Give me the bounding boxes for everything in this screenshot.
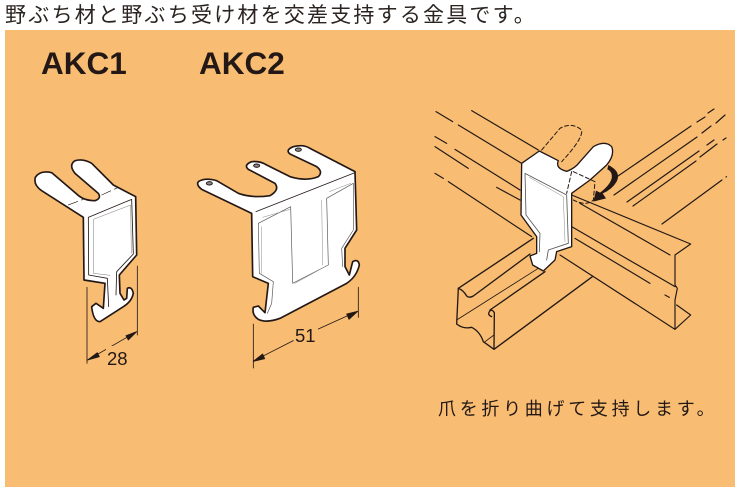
text: 28 [107,348,128,369]
bracket in place [521,143,613,271]
heading: AKC2: AKC2 [199,45,285,81]
label: 28 [106,346,135,368]
diagram: installation view [435,109,726,349]
icon: bending arrow [593,165,618,202]
dashed folded tab [542,125,595,203]
upper channel [435,111,691,329]
caption: 爪を折り曲げて支持します。 [438,399,718,419]
heading: AKC1: AKC1 [41,45,127,81]
dimension: 28 [87,266,137,363]
dimension: 51 [253,287,358,368]
diagram: AKC2 bracket [198,146,359,368]
diagram: AKC1 bracket [35,160,137,363]
lower channel: near section [457,238,592,349]
lower channel: far lines [614,109,726,224]
title: 野ぶち材と野ぶち受け材を交差支持する金具です。 [5,4,537,27]
label: 51: 51 [295,325,316,346]
